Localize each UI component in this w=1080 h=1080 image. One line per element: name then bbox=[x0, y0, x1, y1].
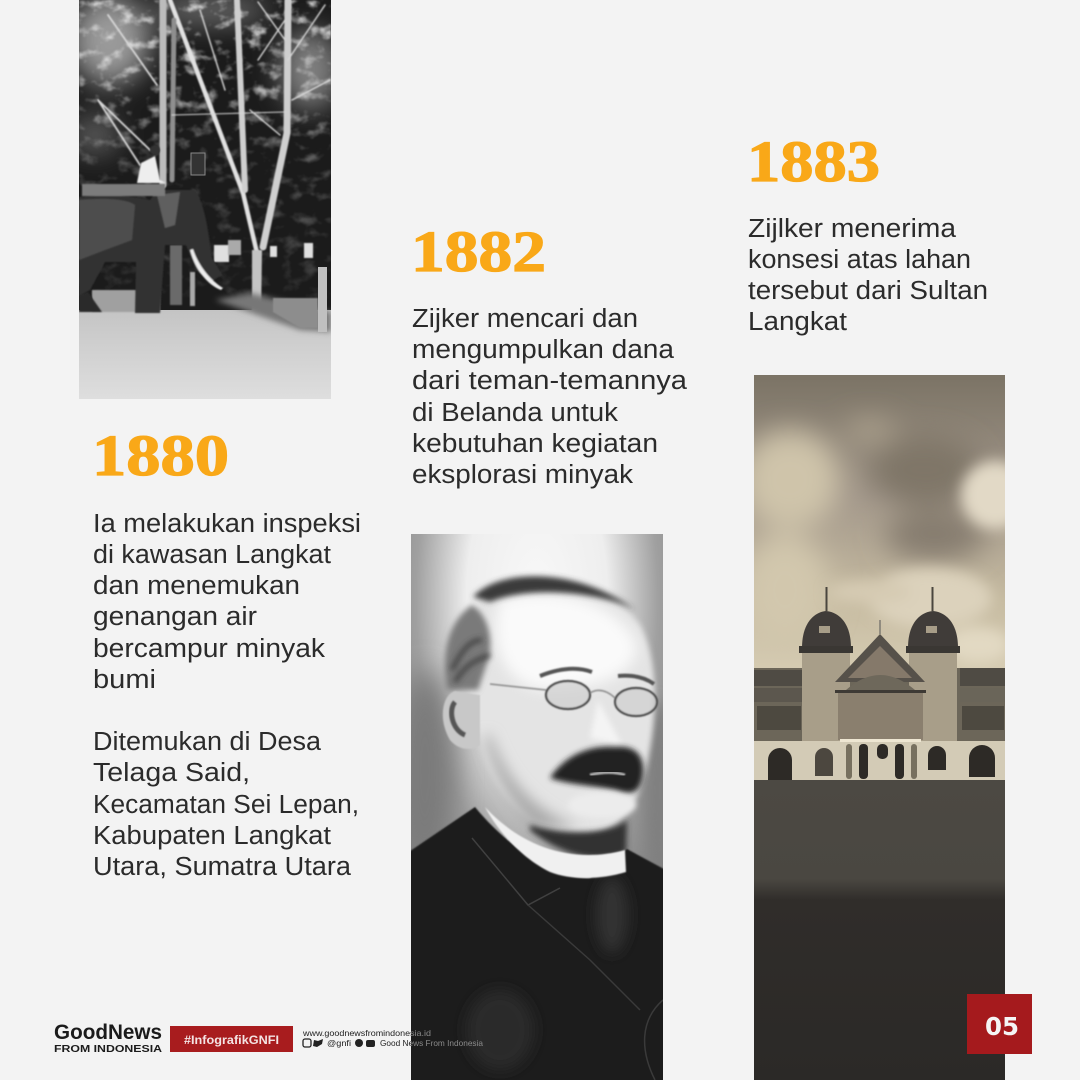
hair bbox=[473, 576, 635, 610]
window band bbox=[757, 706, 801, 730]
rider bbox=[137, 145, 166, 183]
text block: 1882 bbox=[412, 305, 688, 489]
footer links and social icons: www.goodnewsfromindonesia.id bbox=[302, 1028, 431, 1038]
text block: 1880: Kecamatan Sei Lepan, bbox=[93, 791, 359, 819]
text block: 1883: Langkat bbox=[748, 308, 847, 336]
domes bbox=[802, 611, 851, 648]
text block: 1880: Ditemukan di Desa bbox=[93, 728, 322, 756]
text block: 1880 bbox=[93, 510, 361, 881]
year 1882: 1882 bbox=[411, 219, 546, 284]
face bbox=[471, 586, 655, 838]
ground bbox=[79, 310, 331, 399]
side wings bbox=[754, 668, 1005, 742]
arcade bbox=[754, 741, 1005, 780]
text block: 1880: di kawasan Langkat bbox=[93, 541, 331, 569]
text block: 1880: Telaga Said, bbox=[93, 759, 250, 787]
text block: 1882: kebutuhan kegiatan bbox=[412, 430, 658, 458]
year 1883: 1883 bbox=[747, 129, 880, 194]
text block: 1882: eksplorasi minyak bbox=[412, 461, 633, 489]
text block: 1882: mengumpulkan dana bbox=[412, 336, 675, 364]
footer logo: GoodNews From Indonesia bbox=[54, 1021, 162, 1055]
text block: 1880: Kabupaten Langkat bbox=[93, 822, 331, 850]
text block: 1883: konsesi atas lahan bbox=[748, 246, 971, 274]
text block: 1882: dari teman-temannya bbox=[412, 367, 688, 395]
text block: 1880: dan menemukan bbox=[93, 572, 300, 600]
text block: 1882: di Belanda untuk bbox=[412, 399, 618, 427]
elephant bbox=[79, 184, 223, 313]
year 1880: 1880 bbox=[92, 423, 229, 488]
footer links and social icons: Good News From Indonesia bbox=[380, 1038, 483, 1048]
photo: Sultan palace bbox=[754, 375, 1005, 1080]
photo: elephant under trees bbox=[70, 0, 340, 399]
text block: 1880: bercampur minyak bbox=[93, 635, 325, 663]
text block: 1880: Utara, Sumatra Utara bbox=[93, 853, 352, 881]
text block: 1880: Ia melakukan inspeksi bbox=[93, 510, 361, 538]
text block: 1883: tersebut dari Sultan bbox=[748, 277, 988, 305]
text block: 1880: bumi bbox=[93, 666, 156, 694]
moustache bbox=[550, 747, 643, 793]
text block: 1882: Zijker mencari dan bbox=[412, 305, 638, 333]
lips and chin bbox=[590, 772, 625, 775]
lawn bbox=[754, 780, 1005, 1080]
hashtag badge: #InfografikGNFI bbox=[184, 1033, 279, 1047]
page number badge: 05 bbox=[985, 1012, 1019, 1041]
page number badge bbox=[967, 994, 1032, 1054]
footer logo: GoodNews From Indonesia: GoodNews bbox=[54, 1021, 162, 1044]
central gable bbox=[835, 634, 925, 682]
ear bbox=[443, 691, 480, 749]
glasses bbox=[490, 681, 657, 716]
lantern bbox=[191, 153, 205, 175]
tree trunk base bbox=[252, 250, 262, 318]
people bbox=[214, 240, 313, 262]
text block: 1880: genangan air bbox=[93, 603, 258, 631]
coat bbox=[400, 807, 675, 1080]
hashtag badge bbox=[170, 1026, 293, 1052]
eyebrows bbox=[540, 669, 654, 684]
collar bbox=[485, 807, 626, 878]
photo: portrait of Zijlker bbox=[411, 534, 663, 1080]
footer links and social icons bbox=[302, 1028, 483, 1048]
nose shadow bbox=[591, 706, 618, 742]
footer links and social icons: @gnfi bbox=[327, 1038, 351, 1048]
text block: 1883 bbox=[748, 215, 988, 336]
footer logo: GoodNews From Indonesia: FROM INDONESIA bbox=[54, 1043, 162, 1055]
text block: 1883: Zijlker menerima bbox=[748, 215, 957, 243]
towers bbox=[802, 650, 850, 742]
fence post bbox=[318, 267, 327, 332]
